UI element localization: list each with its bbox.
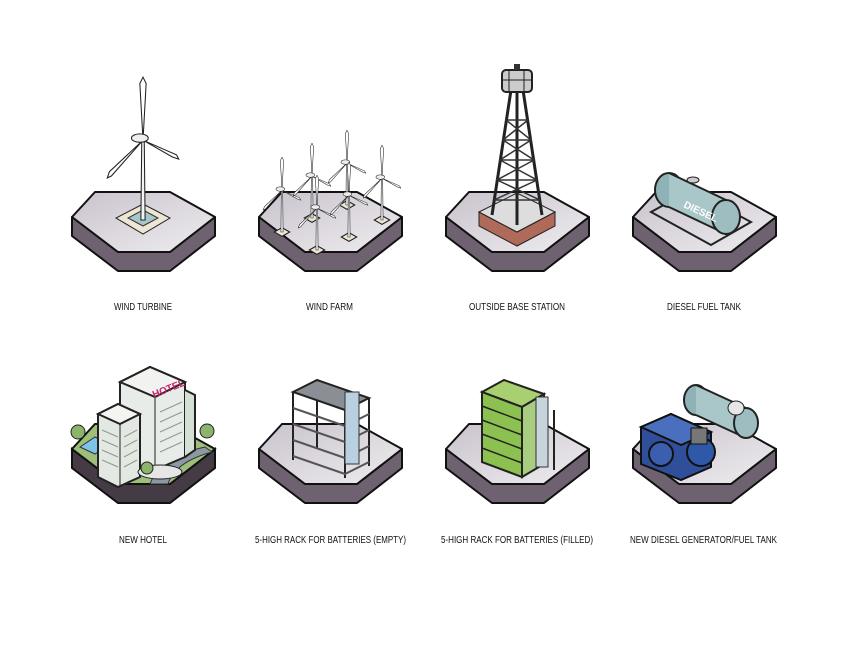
icon: hotel buildings xyxy=(71,367,214,487)
icon: wind farm turbines xyxy=(263,130,401,254)
icon: empty rack xyxy=(293,380,369,478)
panel: diesel generator xyxy=(630,385,777,546)
label: rack empty: 5-HIGH RACK FOR BATTERIES (EMPTY) xyxy=(255,535,406,546)
tile green xyxy=(72,424,215,503)
icon: filled rack xyxy=(482,380,554,477)
label: diesel generator: NEW DIESEL GENERATOR/FUEL TANK xyxy=(630,535,777,546)
icon: wind turbine xyxy=(107,77,179,234)
label: diesel fuel tank: DIESEL FUEL TANK xyxy=(667,302,741,313)
panel: wind farm xyxy=(259,130,402,313)
icon: tower xyxy=(479,64,555,246)
icon: fuel tank: DIESEL xyxy=(682,200,719,225)
label: new hotel: NEW HOTEL xyxy=(119,535,167,546)
icon: generator and tank xyxy=(641,385,758,480)
icon: fuel tank xyxy=(651,173,751,245)
panel: outside base station xyxy=(446,64,589,313)
panel: new hotel xyxy=(71,367,215,546)
panel: rack empty xyxy=(255,380,406,546)
label: outside base station: OUTSIDE BASE STATION xyxy=(469,302,565,313)
panel: wind turbine xyxy=(72,77,215,313)
label: wind turbine: WIND TURBINE xyxy=(114,302,172,313)
icon: hotel buildings: HOTEL xyxy=(151,378,187,401)
label: rack filled: 5-HIGH RACK FOR BATTERIES (FILLED) xyxy=(441,535,593,546)
panel: rack filled xyxy=(441,380,593,546)
label: wind farm: WIND FARM xyxy=(306,302,353,313)
panel: diesel fuel tank xyxy=(633,173,776,313)
